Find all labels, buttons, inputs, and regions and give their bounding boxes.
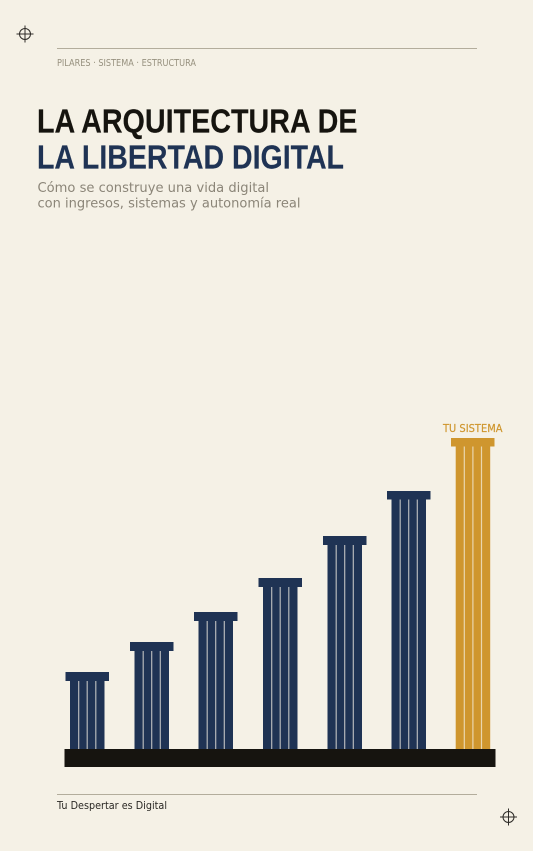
subtitle bbox=[38, 180, 300, 212]
title: LA LIBERTAD DIGITAL bbox=[37, 138, 344, 176]
pillar 5 bbox=[323, 536, 366, 749]
title bbox=[37, 102, 358, 176]
pillar 7: highlighted bbox=[451, 438, 494, 749]
bar chart: rising pillars bbox=[66, 438, 494, 749]
pillar 6 bbox=[387, 491, 430, 749]
icon: registration mark bottom right bbox=[500, 808, 517, 826]
base slab bbox=[64, 749, 496, 767]
subtitle: Cómo se construye una vida digital bbox=[38, 180, 269, 196]
footer text: Tu Despertar es Digital bbox=[56, 800, 167, 812]
top label: PILARES · SISTEMA · ESTRUCTURA bbox=[57, 58, 196, 69]
pillar 4 bbox=[258, 578, 302, 749]
highlight label: TU SISTEMA bbox=[442, 422, 503, 435]
title: LA ARQUITECTURA DE bbox=[37, 102, 358, 140]
pillar 1 bbox=[66, 672, 109, 749]
pillar 2 bbox=[130, 642, 174, 749]
subtitle: con ingresos, sistemas y autonomía real bbox=[38, 196, 300, 212]
pillar 3 bbox=[194, 612, 238, 749]
icon: registration mark top left bbox=[16, 26, 34, 42]
